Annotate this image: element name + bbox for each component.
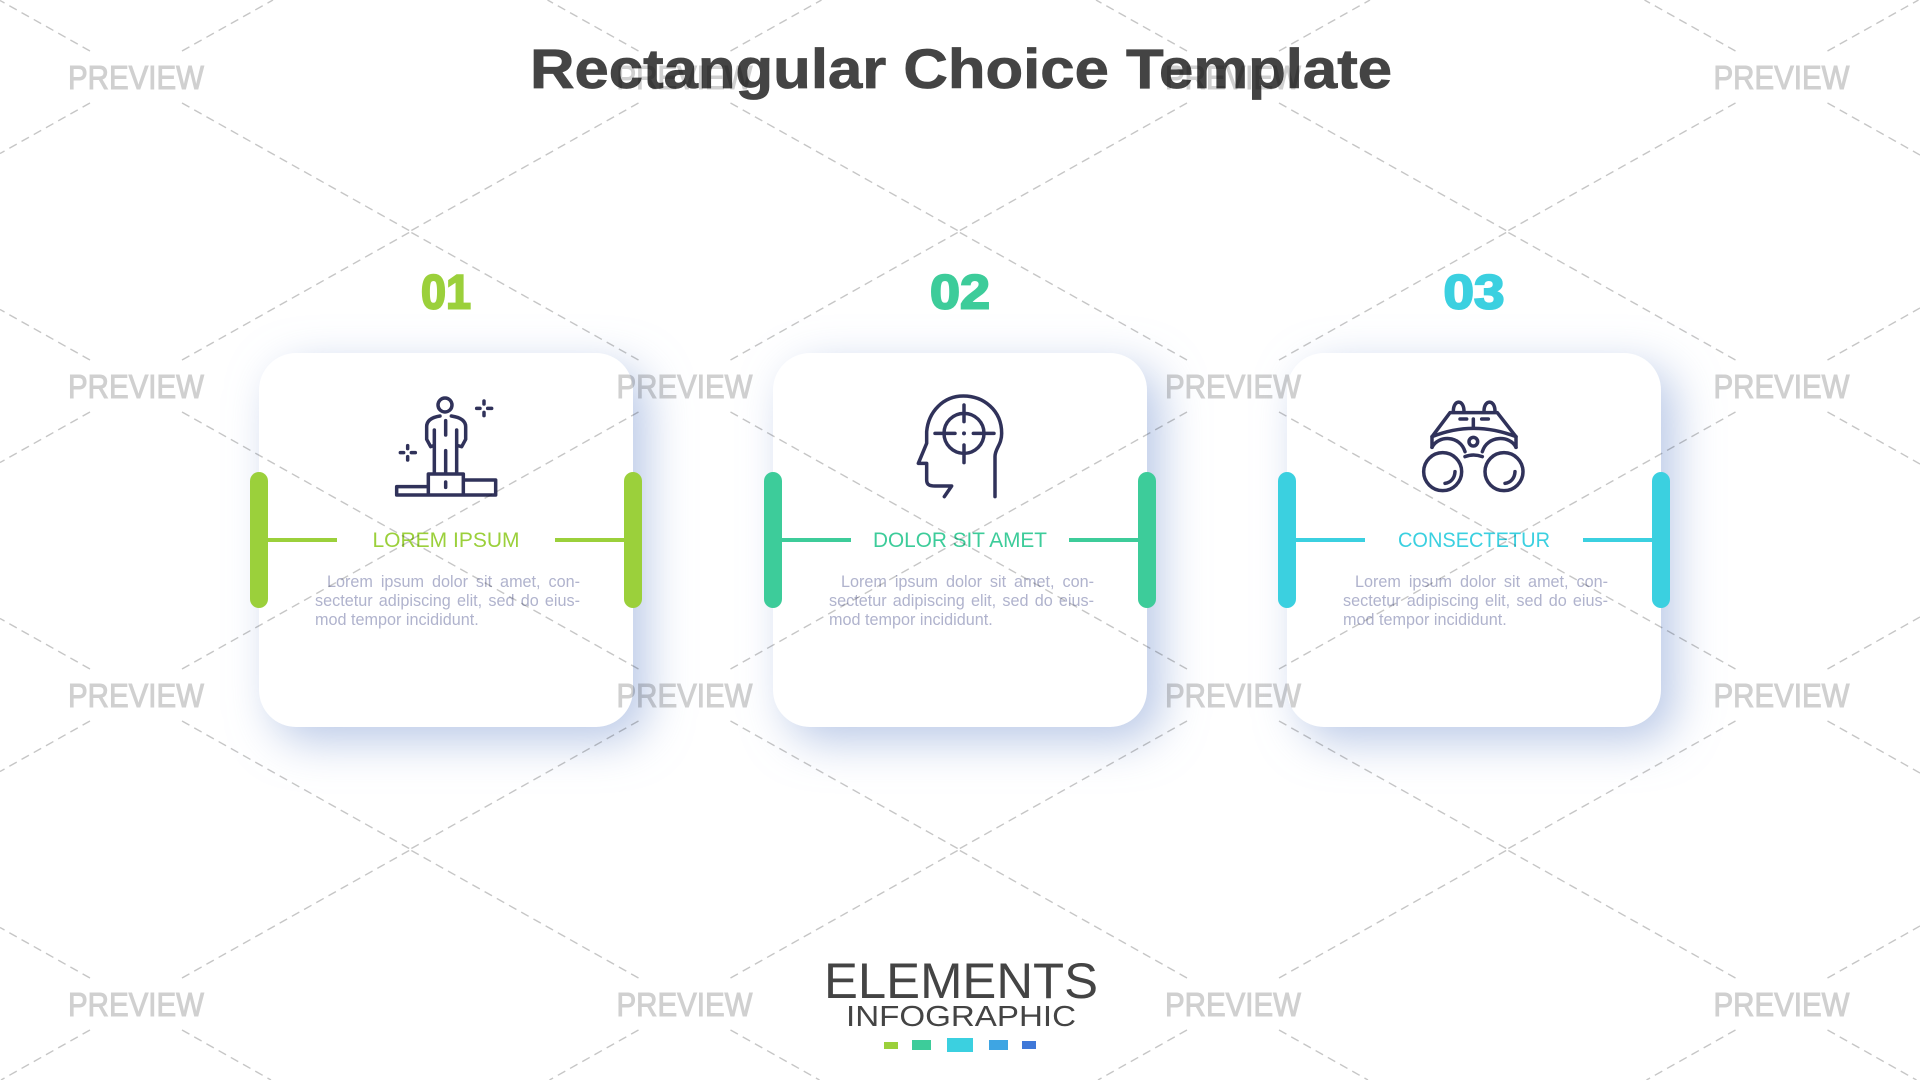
icon: head with crosshair <box>916 394 1004 498</box>
body text: Lorem ipsum dolor sit amet, con- <box>1355 573 1608 591</box>
body text <box>1343 573 1608 629</box>
watermark overlay: PREVIEW <box>616 59 753 96</box>
label: LOREM IPSUM <box>372 529 520 552</box>
watermark overlay: PREVIEW <box>1714 368 1850 405</box>
watermark overlay: PREVIEW <box>68 986 205 1023</box>
watermark overlay: PREVIEW <box>1714 59 1850 96</box>
body text: mod tempor incididunt. <box>829 611 993 629</box>
right bar <box>1138 472 1156 608</box>
label: DOLOR SIT AMET <box>873 529 1047 552</box>
title: Rectangular Choice Template <box>530 37 1392 100</box>
watermark overlay: PREVIEW <box>1165 986 1302 1023</box>
watermark overlay: PREVIEW <box>616 368 753 405</box>
left bar <box>764 472 782 608</box>
watermark overlay: PREVIEW <box>1165 368 1302 405</box>
panel: step 1 <box>248 270 672 766</box>
watermark overlay: PREVIEW <box>1714 677 1850 714</box>
body text: Lorem ipsum dolor sit amet, con- <box>327 573 580 591</box>
logo colour squares <box>884 1038 1036 1052</box>
label: CONSECTETUR <box>1398 529 1550 552</box>
right connector <box>1069 538 1138 542</box>
card <box>773 353 1147 727</box>
card <box>259 353 633 727</box>
body text: sectetur adipiscing elit, sed do eius- <box>1343 592 1608 610</box>
logo wordmark <box>824 955 1098 1033</box>
right bar <box>624 472 642 608</box>
body text: Lorem ipsum dolor sit amet, con- <box>841 573 1094 591</box>
watermark overlay: PREVIEW <box>68 59 205 96</box>
left connector <box>782 538 851 542</box>
body text: sectetur adipiscing elit, sed do eius- <box>829 592 1094 610</box>
watermark overlay: PREVIEW <box>1165 59 1302 96</box>
left connector <box>268 538 337 542</box>
body text <box>829 573 1094 629</box>
body text: mod tempor incididunt. <box>315 611 479 629</box>
body text <box>315 573 580 629</box>
card <box>1287 353 1661 727</box>
panel: step 3 <box>1276 270 1700 766</box>
left bar <box>250 472 268 608</box>
body text: sectetur adipiscing elit, sed do eius- <box>315 592 580 610</box>
watermark overlay: PREVIEW <box>68 677 205 714</box>
right bar <box>1652 472 1670 608</box>
right connector <box>555 538 624 542</box>
right connector <box>1583 538 1652 542</box>
watermark overlay: PREVIEW <box>1714 986 1850 1023</box>
watermark overlay: PREVIEW <box>616 986 753 1023</box>
watermark overlay: PREVIEW <box>68 368 205 405</box>
watermark overlay: PREVIEW <box>616 677 753 714</box>
logo wordmark: INFOGRAPHIC <box>846 1001 1076 1033</box>
watermark overlay: PREVIEW <box>1165 677 1302 714</box>
icon: man on podium <box>394 396 498 497</box>
body text: mod tempor incididunt. <box>1343 611 1507 629</box>
left bar <box>1278 472 1296 608</box>
icon: binoculars <box>1422 400 1525 492</box>
left connector <box>1296 538 1365 542</box>
panel: step 2 <box>762 270 1186 766</box>
logo <box>824 955 1098 1052</box>
